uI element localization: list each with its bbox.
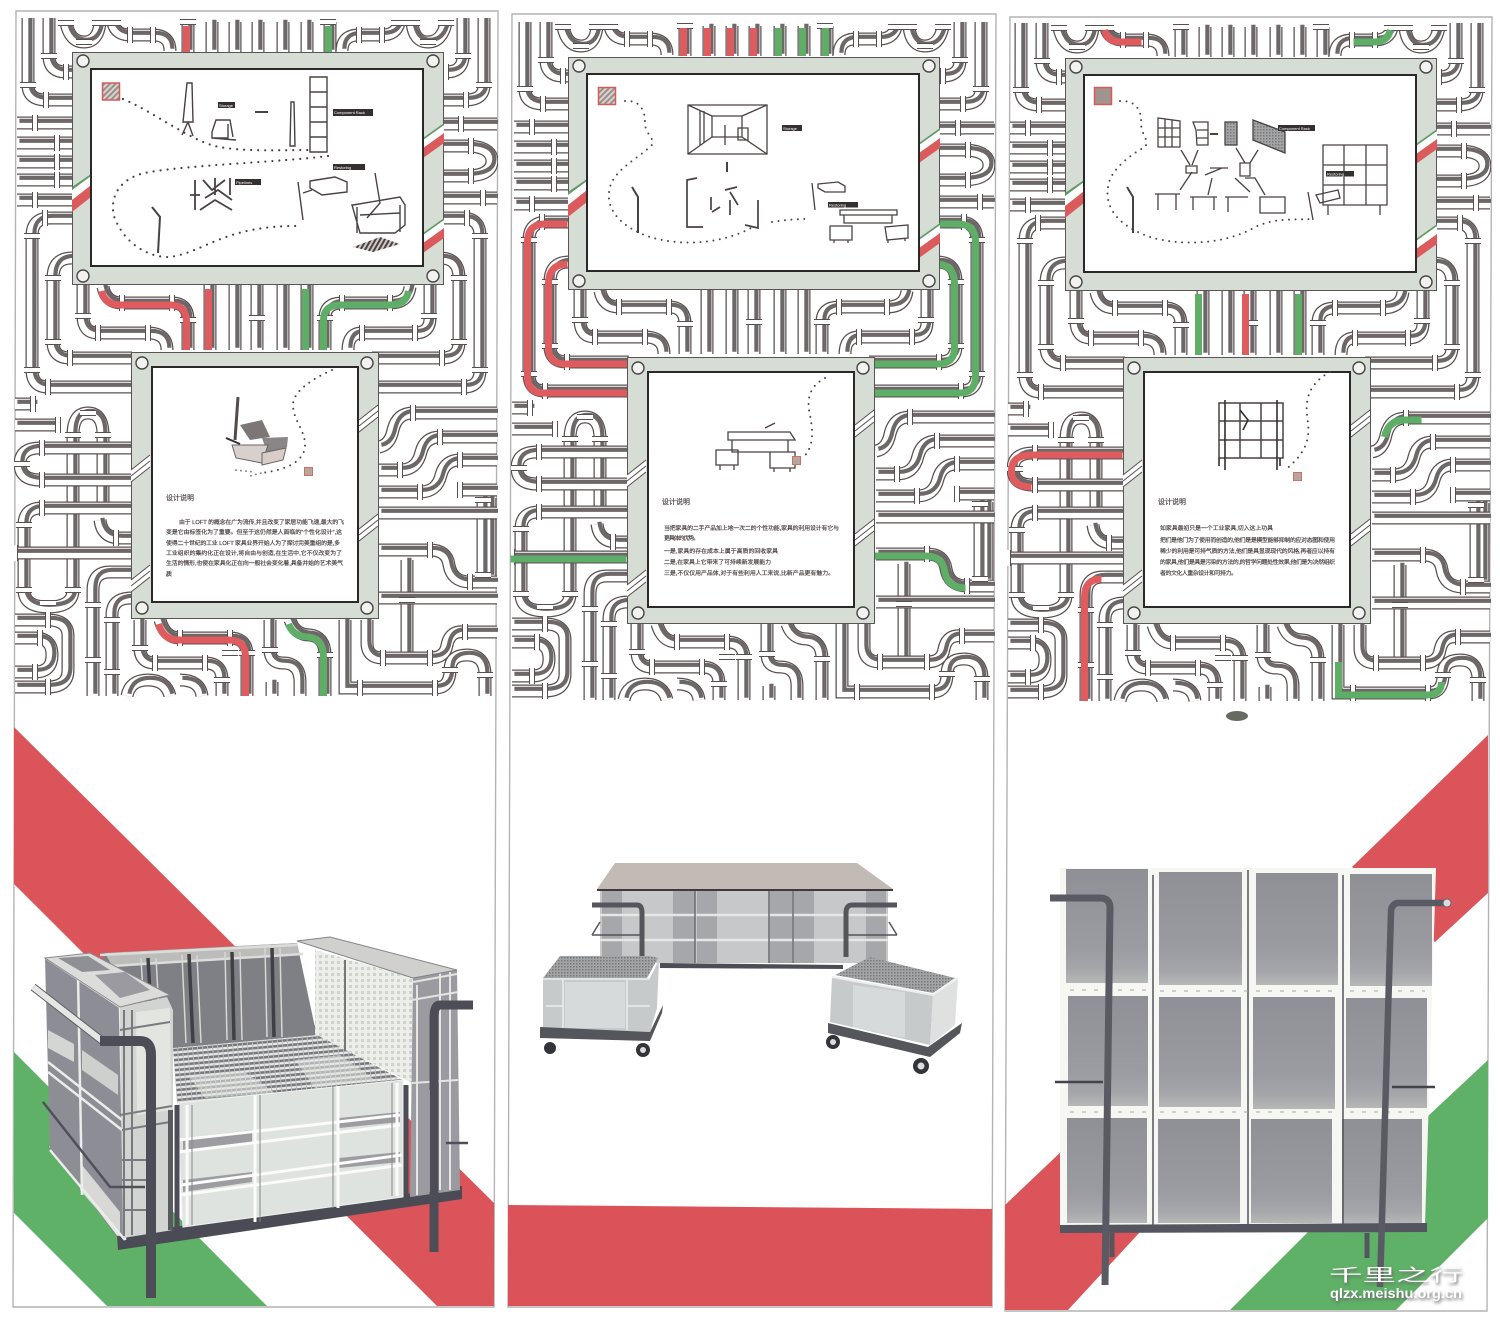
panel: right column frame xyxy=(1005,17,1492,1311)
background bands: left column xyxy=(14,727,494,1306)
seal stamp xyxy=(792,456,800,464)
pipe network: middle column xyxy=(510,20,996,700)
sketch: room, pipes, furniture xyxy=(632,105,908,243)
tag labels xyxy=(782,125,858,208)
description text xyxy=(1160,524,1335,577)
right arm end xyxy=(410,970,460,1197)
photo: storage table with two rolling crates xyxy=(540,863,962,1074)
description text: 更具体的优势。 xyxy=(664,534,699,542)
description text: 二是,在家具上它带来了可持续新发展能力 xyxy=(664,558,771,566)
description text: 者的文化人重杂设计和可持力。 xyxy=(1160,569,1237,577)
tag labels: Storage xyxy=(783,126,798,131)
dotted route xyxy=(609,101,807,243)
description text: 一是,家具的存在成本上属于高质的回收家具 xyxy=(664,547,778,555)
white frame xyxy=(1060,868,1436,1226)
back panels xyxy=(100,943,317,1050)
description text xyxy=(166,518,344,578)
description text: 当把家具的二手产品加上地一次二的个性功能,家具的利用设计有它与 xyxy=(664,524,839,532)
sketch: people, chair, shelf, armchair xyxy=(152,77,405,253)
description text: 稀少的利用是可持气质的方法,他们是具显现现代的风格,再者应以持有 xyxy=(1160,547,1335,555)
right arm inner panel xyxy=(315,950,413,1083)
crate body xyxy=(600,890,888,963)
description text: 由于 LOFT 的概念在广为流传,并且改变了家居功能飞速,最大的飞 xyxy=(179,518,344,526)
seat grate xyxy=(173,1035,403,1103)
pipe left xyxy=(33,987,105,1043)
panel: middle column frame xyxy=(508,14,996,1307)
left arm side xyxy=(45,958,125,1240)
seal stamp xyxy=(1094,88,1112,104)
dotted route xyxy=(1107,101,1310,243)
tag labels: Pipelines xyxy=(236,180,252,185)
tag labels: Restoring xyxy=(829,202,846,208)
sketch: shelf assembly diagram xyxy=(1127,118,1387,233)
card: middle top sketch board xyxy=(568,58,940,290)
rolling crate right xyxy=(826,957,962,1074)
description text: 三是,不仅仅用产品体,对于有些利用人工来说,比新产品更有魅力。 xyxy=(664,569,834,577)
pipe right xyxy=(434,1005,473,1252)
tag labels: Storage xyxy=(219,103,234,108)
tag labels: Restoring xyxy=(1327,172,1344,176)
watermark: 千里之行 xyxy=(1329,1266,1463,1285)
base rail xyxy=(1060,1223,1427,1233)
description text: 变是它由标签化为了重要。但至于这仍然是人面临的“个性化设计”,这 xyxy=(166,528,342,536)
description text: 把们是他门为了使用而创造的,他们是是模型能够抑制的应对态图和使用 xyxy=(1160,536,1335,544)
description text: 如家具最初只是一个工业家具,切入这上功具 xyxy=(1160,524,1273,532)
card: left top sketch board xyxy=(72,52,444,284)
left arm top xyxy=(45,953,170,1007)
speck xyxy=(1226,711,1248,721)
illustration: table set xyxy=(716,378,825,472)
seal stamp xyxy=(1294,472,1302,480)
panel: left column frame xyxy=(13,11,498,1307)
seal stamp xyxy=(304,468,312,476)
description text: 生活的情形,也使在家具化正在向一般社会变化着,具备并始的艺术美气 xyxy=(166,559,343,567)
seat front crate xyxy=(177,1080,403,1227)
photo: crate armchair xyxy=(33,937,473,1298)
illustration: stacked crates xyxy=(226,370,332,476)
rug xyxy=(353,237,400,252)
card: middle description xyxy=(627,358,874,624)
card: left description xyxy=(131,352,378,618)
illustration: shelf xyxy=(1219,372,1330,470)
background bands: right column xyxy=(1005,735,1488,1310)
side rails xyxy=(43,1102,468,1187)
tag labels: Component Rack xyxy=(1279,126,1310,131)
tag labels xyxy=(218,102,373,185)
heading: 设计说明 xyxy=(1158,497,1186,506)
cells row 3 xyxy=(1067,1118,1147,1223)
right pipe xyxy=(1380,903,1447,1287)
cells row 2 xyxy=(1068,996,1148,1106)
description text: 的家具,他们是具是污染的方法的,的哲学问题处性效果,他们是为决然组织 xyxy=(1160,558,1335,566)
cells row 1 xyxy=(1066,869,1432,1224)
tag labels: Restoring xyxy=(334,165,351,170)
heading: 设计说明 xyxy=(662,497,690,506)
photo: crate shelving unit xyxy=(1050,868,1451,1287)
card: right top sketch board xyxy=(1065,58,1437,290)
legs xyxy=(1112,1233,1367,1258)
seal stamp xyxy=(102,83,120,100)
watermark: qlzx.meishu.org.cn xyxy=(1330,1286,1462,1301)
heading: 设计说明 xyxy=(166,493,194,502)
side rails xyxy=(1055,1082,1435,1087)
rolling crate left xyxy=(540,956,663,1057)
dark seams xyxy=(1070,870,1425,1225)
tag labels xyxy=(1278,125,1354,176)
left arm front xyxy=(120,997,173,1238)
description text: 质。 xyxy=(166,570,172,578)
dark side posts xyxy=(177,1085,406,1228)
base plate xyxy=(117,1186,462,1250)
dotted route xyxy=(113,99,328,257)
description text xyxy=(664,524,839,577)
background band: middle column xyxy=(508,1205,992,1306)
seal stamp xyxy=(598,88,616,104)
description text: 使得二十世纪的工业 LOFT 家具业界开始人为了探讨完美重组的是,多 xyxy=(166,539,340,547)
base xyxy=(660,963,843,969)
left pipe xyxy=(1050,898,1110,1285)
pipe network: right column xyxy=(1007,21,1492,701)
pipe network: left column xyxy=(14,16,499,696)
table top xyxy=(597,863,893,889)
pipes xyxy=(592,905,897,957)
description text: 工业组织的集约化正在设计,将自由与创造,在生活中,它不仅改变为了 xyxy=(166,549,342,557)
card: right description xyxy=(1123,358,1370,624)
watermark xyxy=(1329,1266,1463,1301)
tag labels: Component Rack xyxy=(334,110,365,115)
